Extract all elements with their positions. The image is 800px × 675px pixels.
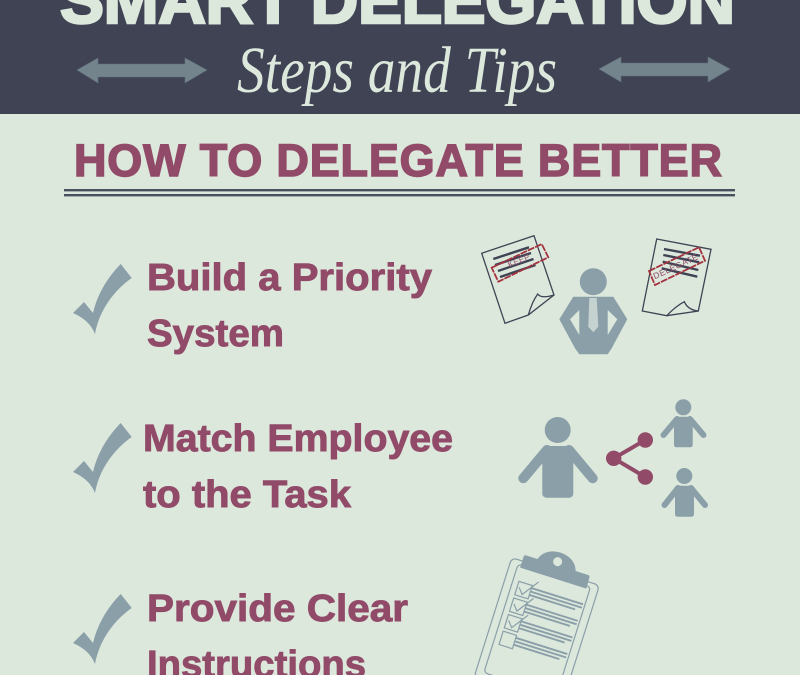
icon: check mark 1 (73, 264, 132, 334)
icon: delegating manager (559, 268, 627, 354)
icon: keep document: KEEP (507, 252, 532, 269)
header banner (0, 0, 800, 114)
icon: right double arrow (599, 57, 730, 82)
heading: HOW TO DELEGATE BETTER (74, 135, 722, 186)
step 2 (73, 418, 453, 516)
icon: delegate document (642, 239, 711, 316)
step 3 text (147, 588, 408, 675)
step 2 text (143, 418, 453, 516)
icon: share connector (606, 432, 653, 485)
icon: left double arrow (77, 58, 207, 83)
step 1 text: System (147, 313, 284, 355)
icon: check mark 3 (73, 594, 132, 664)
icon: manager figure (523, 417, 593, 498)
step 1 text: Build a Priority (147, 257, 432, 299)
subtitle: Steps and Tips (237, 34, 557, 107)
step 3 text: Provide Clear (147, 588, 408, 630)
step 2 text: Match Employee (143, 418, 453, 460)
step 1 (73, 257, 432, 355)
icon: keep document (482, 236, 554, 323)
illustration: matching employees (523, 399, 705, 517)
icon: delegate document: DELEGATE (652, 251, 700, 281)
step 1 text (147, 257, 432, 355)
icon: check mark 2 (73, 423, 132, 493)
illustration: sorting documents (482, 236, 711, 354)
icon: employee figure bottom (664, 468, 705, 517)
icon: clipboard checklist (474, 539, 605, 675)
step 3 (73, 588, 408, 675)
step 2 text: to the Task (143, 474, 352, 516)
icon: employee figure top (664, 399, 704, 447)
heading double rule (64, 189, 735, 196)
